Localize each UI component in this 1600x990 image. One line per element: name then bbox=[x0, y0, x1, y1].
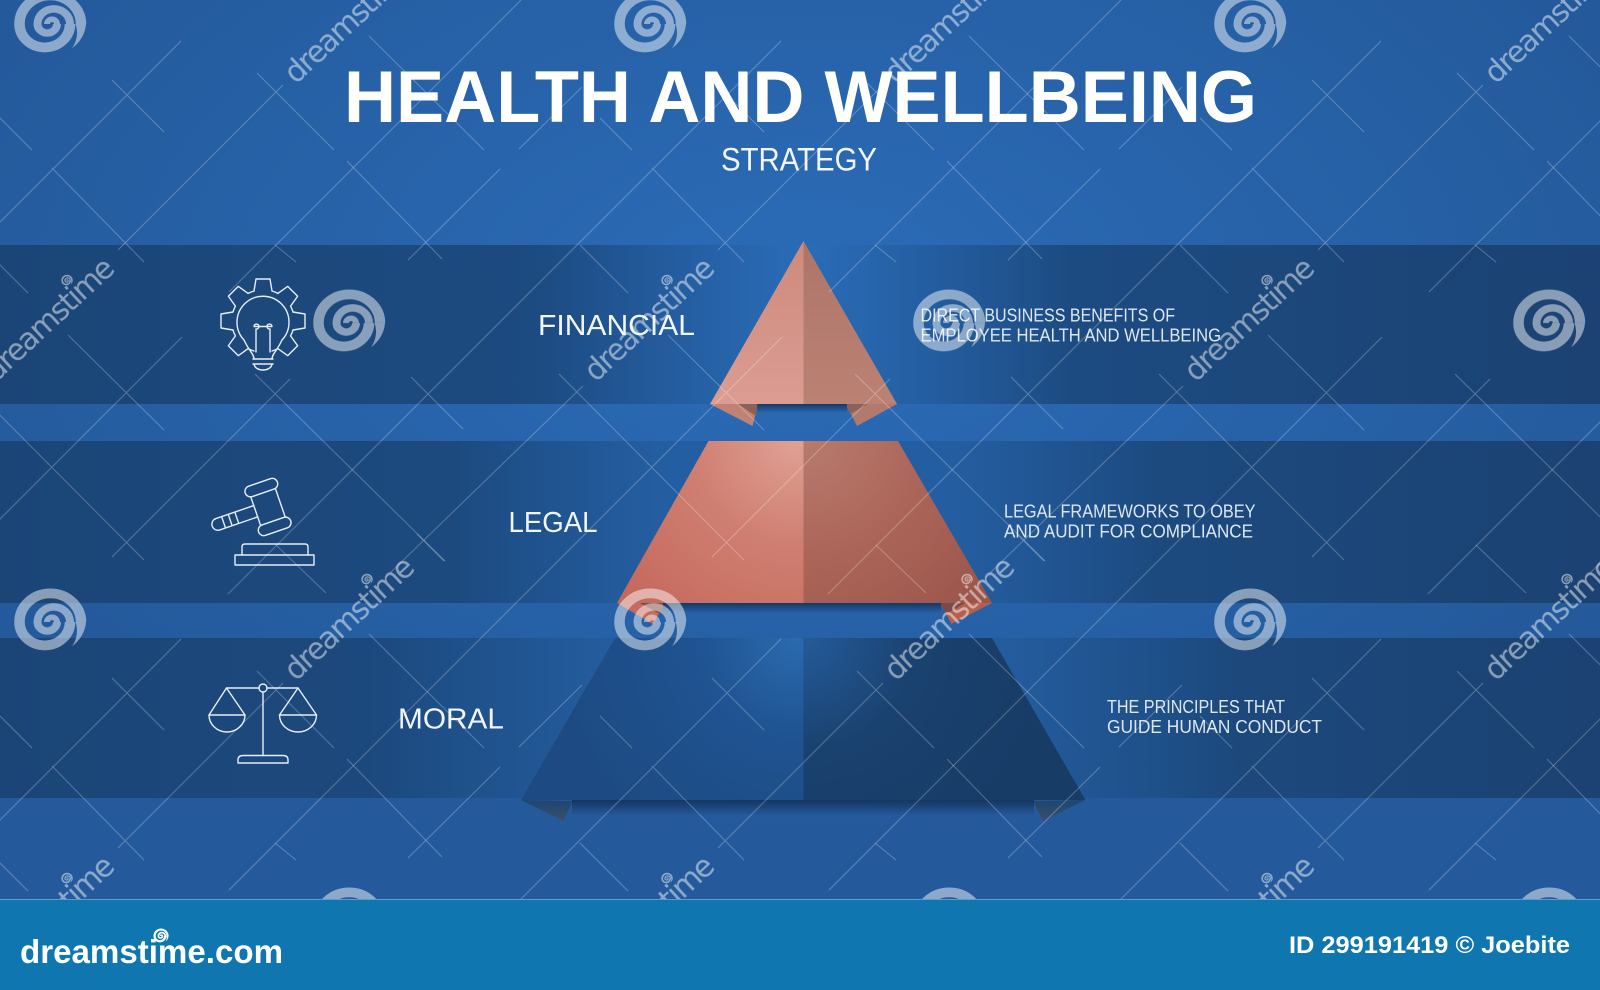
subtitle: STRATEGY bbox=[721, 142, 877, 178]
description: financial bbox=[920, 306, 1221, 346]
description: legal: LEGAL FRAMEWORKS TO OBEY bbox=[1004, 502, 1256, 522]
label: moral: MORAL bbox=[398, 704, 504, 736]
band: moral row bbox=[0, 638, 1600, 798]
tier: legal bbox=[617, 441, 992, 624]
tier: moral bbox=[521, 638, 1086, 821]
watermark wordmarks: dreamstime bbox=[277, 550, 422, 688]
description: financial: DIRECT BUSINESS BENEFITS OF bbox=[920, 306, 1175, 326]
watermark wordmarks: dreamstime bbox=[577, 251, 722, 389]
description: legal: AND AUDIT FOR COMPLIANCE bbox=[1004, 522, 1253, 542]
description: financial: EMPLOYEE HEALTH AND WELLBEING bbox=[920, 326, 1221, 346]
footer image id: ID 299191419 © Joebite bbox=[1289, 932, 1570, 959]
glow behind moral tier bbox=[370, 638, 1240, 798]
footer bar bbox=[0, 899, 1600, 990]
description: moral bbox=[1107, 697, 1322, 737]
label: legal: LEGAL bbox=[508, 507, 598, 539]
watermark wordmarks: dreamstime bbox=[577, 849, 722, 987]
footer logo: dreamstime.com bbox=[20, 933, 283, 970]
watermark wordmarks: dreamstime bbox=[877, 550, 1022, 688]
description: legal bbox=[1004, 502, 1256, 542]
glow behind legal tier bbox=[450, 441, 1160, 603]
watermark wordmarks: dreamstime bbox=[1177, 849, 1322, 987]
icon: gavel bbox=[204, 477, 314, 565]
pyramid bbox=[521, 241, 1086, 821]
glow behind financial tier bbox=[540, 245, 1070, 404]
band: financial row bbox=[0, 245, 1600, 404]
icon: balance scales bbox=[209, 684, 316, 763]
label: financial: FINANCIAL bbox=[538, 310, 695, 342]
description: moral: THE PRINCIPLES THAT bbox=[1107, 697, 1285, 717]
band: legal row bbox=[0, 441, 1600, 603]
icon: gear with light bulb bbox=[221, 279, 305, 370]
tier: financial bbox=[710, 241, 897, 426]
description: moral: GUIDE HUMAN CONDUCT bbox=[1107, 717, 1322, 737]
watermark wordmarks: dreamstime bbox=[1177, 251, 1322, 389]
title: HEALTH AND WELLBEING bbox=[344, 57, 1257, 138]
